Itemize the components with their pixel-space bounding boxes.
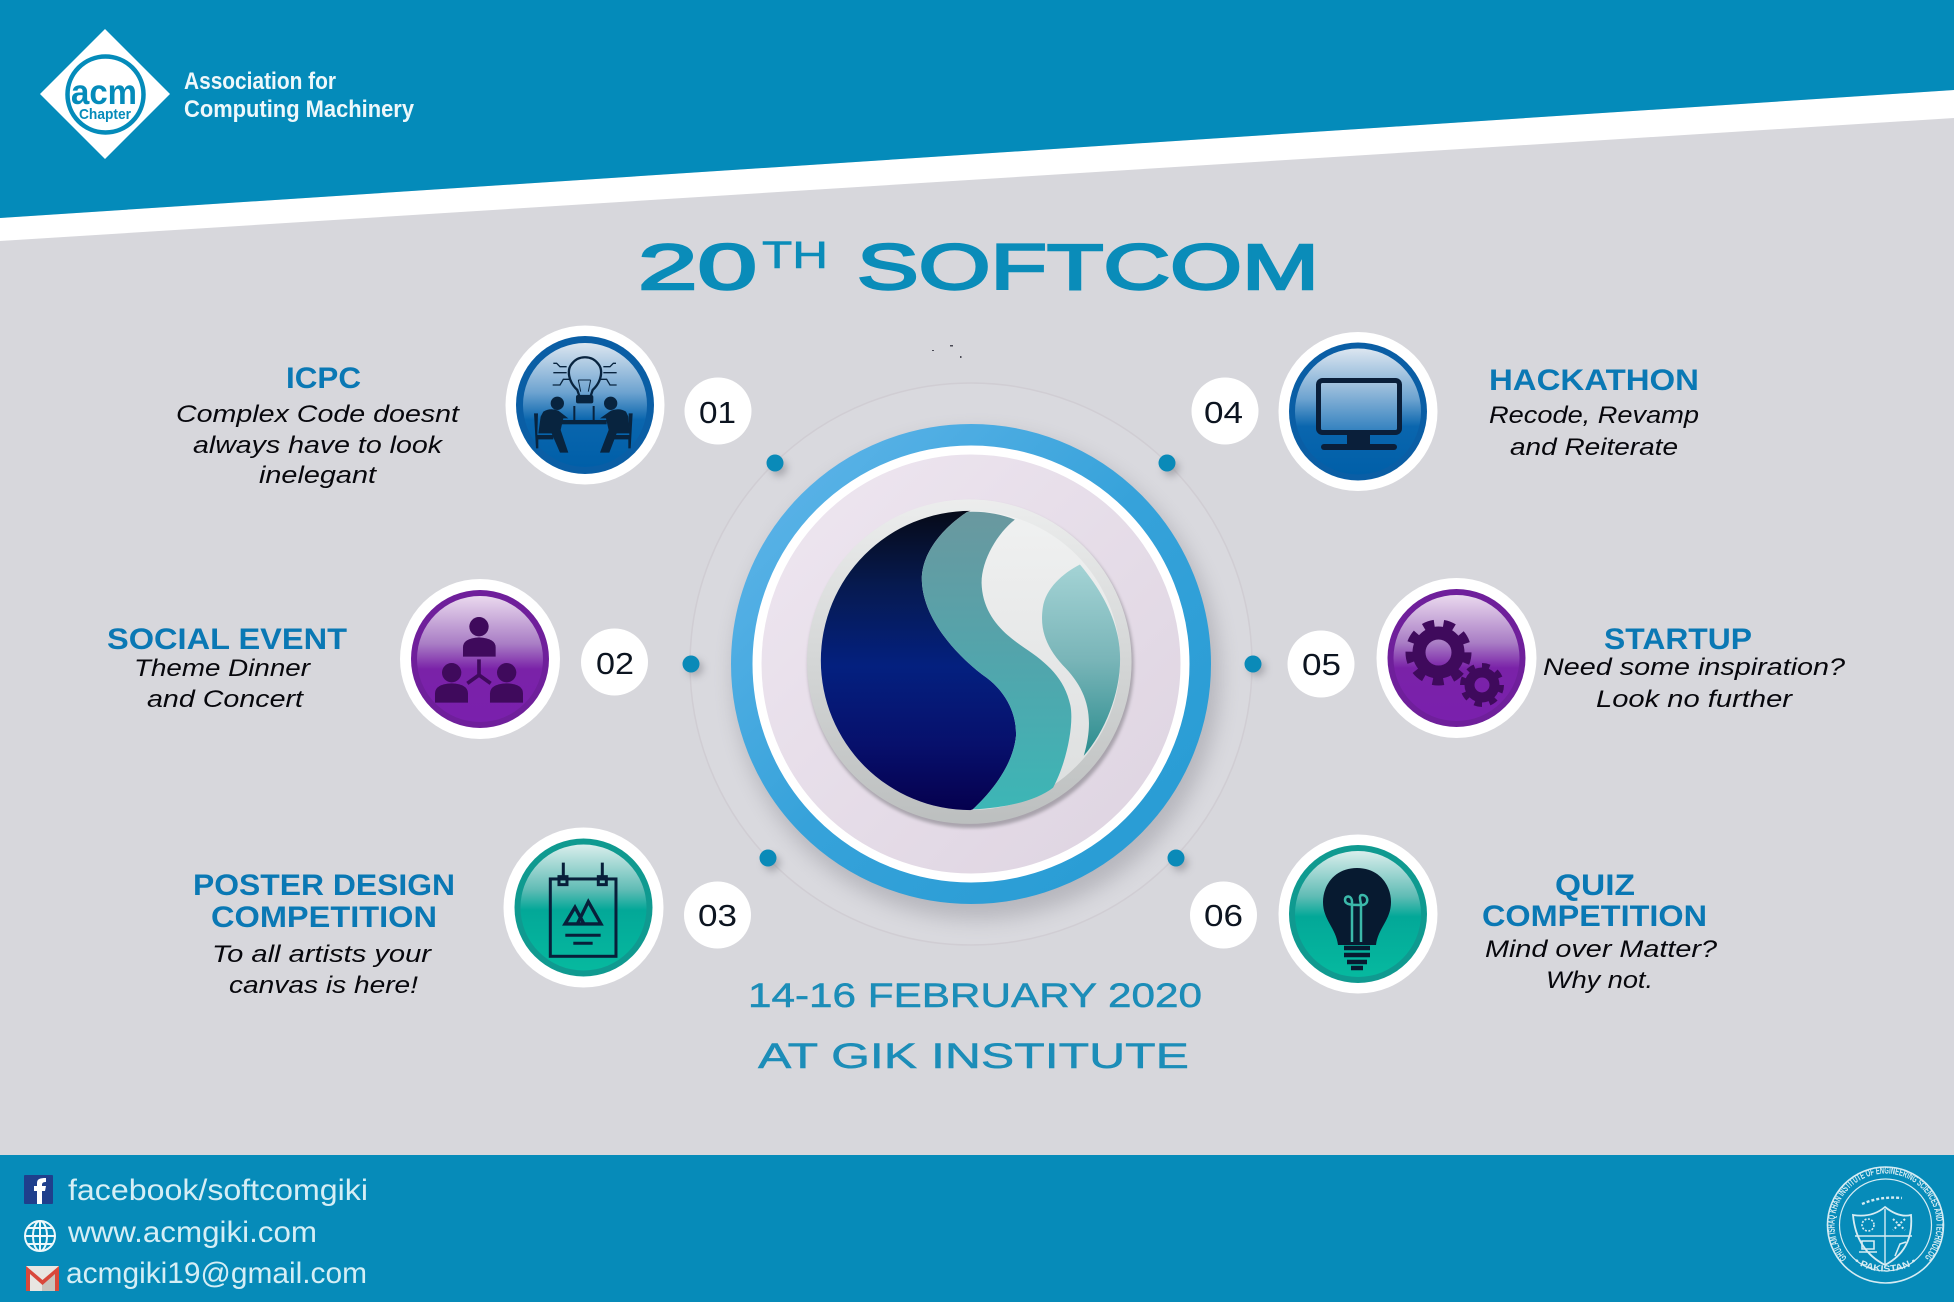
email address: acmgiki19@gmail.com [66,1257,367,1290]
facebook address: facebook/softcomgiki [68,1174,368,1207]
ICPC text: Complex Code doesnt [176,401,461,428]
icon: monitor [1278,332,1438,491]
Startup text: STARTUP [1604,623,1752,656]
association name: Computing Machinery [184,96,415,123]
SOFTCOM logo [807,499,1134,828]
Social Event text: Theme Dinner [134,655,311,682]
Poster Design text [193,869,455,999]
Quiz text: QUIZ [1555,869,1635,902]
title: TH [762,235,828,277]
Hackathon text [1489,364,1699,461]
Poster Design text: canvas is here! [229,972,418,999]
icon: social event group [400,579,560,739]
Poster Design text: To all artists your [212,941,432,968]
Poster Design text: POSTER DESIGN [193,869,455,902]
Startup text: Look no further [1596,686,1793,713]
number badges: 05 [1302,647,1341,682]
number badges: 01 [699,395,736,430]
icon: ICPC team with lightbulb [506,326,664,484]
number badges: 03 [698,898,737,933]
Poster Design text: COMPETITION [211,901,437,934]
institute seal: GHULAM ISHAQ KHAN INSTITUTE OF ENGINEERING SCIENCES AND TECHNOLOGY [1828,1168,1943,1262]
icon: mail [26,1266,59,1291]
header band [0,0,1954,241]
title: SOFTCOM [857,231,1319,303]
ICPC text: ICPC [286,362,361,395]
icon: globe [25,1221,55,1251]
Hackathon text: HACKATHON [1489,364,1699,397]
event date: 14-16 FEBRUARY 2020 [748,977,1202,1015]
Quiz text: Mind over Matter? [1485,936,1718,963]
number badges: 02 [596,646,634,681]
icon: gears [1376,578,1536,738]
title: 20 [638,231,757,303]
icon: lightbulb [1278,834,1438,994]
title [638,231,1319,303]
central emblem [690,383,1252,945]
Hackathon text: Recode, Revamp [1489,402,1699,429]
association name: Association for [184,68,336,95]
ICPC text [176,362,461,489]
stray marks above emblem [932,345,962,358]
ring marker dots [682,454,1265,871]
Startup text [1543,623,1846,713]
number badges: 06 [1204,898,1243,933]
Startup text: Need some inspiration? [1543,654,1846,681]
Quiz text [1482,869,1718,994]
Quiz text: Why not. [1546,967,1653,994]
ICPC text: always have to look [193,432,444,459]
Social Event text [107,623,347,713]
number badges [581,378,1354,948]
icon: facebook [24,1175,53,1204]
ICPC text: inelegant [259,462,378,489]
ACM logo: acm [71,73,137,112]
footer band [0,1155,1954,1302]
number badges: 04 [1204,395,1243,430]
Quiz text: COMPETITION [1482,900,1707,933]
ACM logo: Chapter [79,106,131,123]
institute seal: • PAKISTAN • [1855,1259,1915,1272]
outer blue ring [742,435,1200,893]
icon: poster [504,828,664,988]
Hackathon text: and Reiterate [1510,434,1678,461]
white ring and mauve disc [757,450,1185,878]
website address: www.acmgiki.com [67,1216,317,1249]
Social Event text: and Concert [147,686,305,713]
Social Event text: SOCIAL EVENT [107,623,347,656]
ACM logo [40,29,170,159]
association name [184,68,415,123]
event venue: AT GIK INSTITUTE [758,1037,1189,1076]
